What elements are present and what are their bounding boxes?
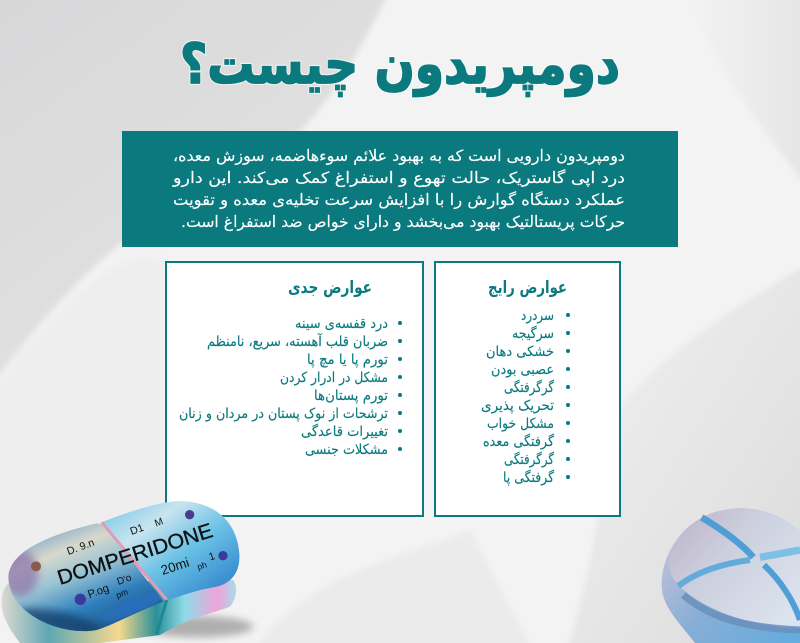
list: common side effects: خشکی دهان: [486, 344, 554, 360]
panel: description: دومپریدون دارویی است که به بهبود علائم سوءهاضمه، سوزش معده،: [173, 147, 625, 166]
list: serious side effects: [179, 316, 402, 458]
list: common side effects: گرگرفتگی: [504, 451, 554, 468]
capsule label: DOMPERIDONE: [55, 519, 216, 590]
panel: serious side effects: [166, 262, 423, 516]
capsule label: M: [153, 516, 165, 529]
list: common side effects: [481, 308, 570, 486]
heading: common side effects: عوارض رایج: [488, 278, 567, 298]
list: common side effects: عصبی بودن: [491, 362, 554, 378]
list: serious side effects: مشکلات جنسی: [305, 442, 388, 458]
capsule label: D. 9.n: [65, 537, 96, 558]
panel: description: عملکرد دستگاه گوارش را با افزایش سرعت تخلیه‌ی معده و تقویت: [173, 191, 625, 210]
capsule label: 20mi: [159, 555, 191, 578]
list: serious side effects: مشکل در ادرار کردن: [280, 370, 388, 386]
list: serious side effects: تغییرات قاعدگی: [301, 423, 388, 440]
panel: description: حرکات پریستالتیک بهبود می‌بخشد و دارای خواص ضد استفراغ است.: [181, 213, 625, 232]
list: common side effects: گرفتگی معده: [483, 433, 554, 450]
list: serious side effects: ترشحات از نوک پستان در مردان و زنان: [179, 406, 388, 422]
list: common side effects: گرفتگی پا: [503, 469, 554, 486]
list: serious side effects: تورم پا یا مچ پا: [307, 352, 388, 368]
list: serious side effects: ضربان قلب آهسته، سریع، نامنظم: [207, 333, 388, 350]
capsule label: ph: [196, 559, 208, 572]
icon: domperidone capsule: [2, 501, 253, 643]
list: common side effects: سردرد: [521, 308, 554, 324]
capsule label: D'o: [116, 572, 134, 588]
panel: common side effects: [435, 262, 620, 516]
list: common side effects: تحریک پذیری: [481, 398, 554, 414]
capsule label: P.og: [86, 582, 111, 601]
title: دومپریدون چیست؟: [180, 32, 620, 97]
heading: serious side effects: عوارض جدی: [288, 278, 372, 298]
list: serious side effects: تورم پستان‌ها: [314, 388, 388, 404]
list: common side effects: سرگیجه: [512, 325, 554, 342]
panel: description: [122, 131, 678, 247]
list: serious side effects: درد قفسه‌ی سینه: [295, 316, 388, 332]
capsule label: D1: [129, 522, 146, 538]
list: common side effects: مشکل خواب: [487, 416, 554, 432]
icon: scored tablet: [662, 508, 800, 643]
capsule label: pm: [115, 587, 129, 600]
title: دومپریدون چیست؟: [180, 32, 620, 97]
capsule label: 1: [207, 550, 217, 564]
panel: description: درد اپی گاستریک، حالت تهوع و استفراغ کمک می‌کند. این دارو: [172, 169, 625, 188]
list: common side effects: گرگرفتگی: [504, 379, 554, 396]
